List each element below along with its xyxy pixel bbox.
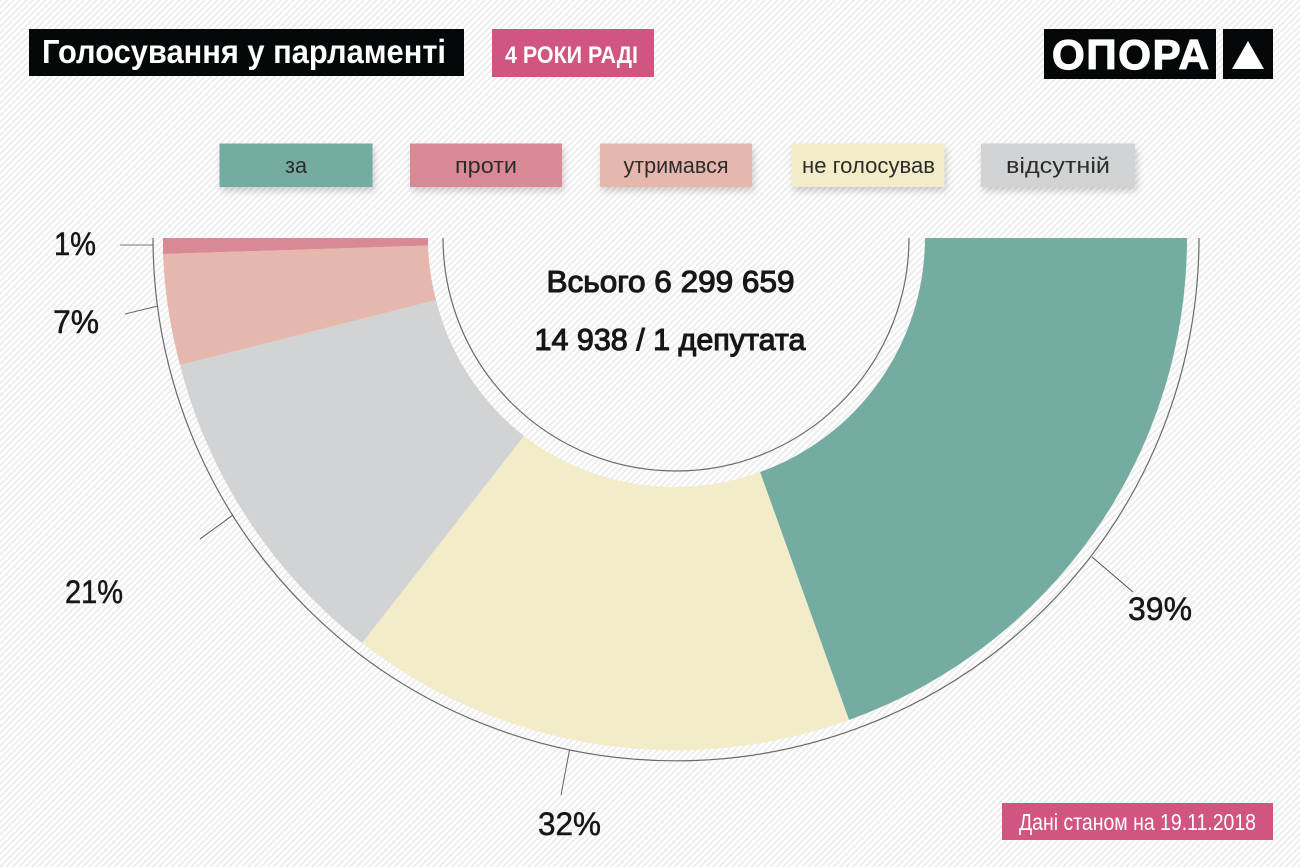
center total: Всього 6 299 659 [546, 264, 794, 299]
segment: не голосував 32% [362, 436, 849, 750]
legend item: за [220, 144, 372, 187]
semi-donut chart [163, 238, 1187, 750]
segment: відсутній 21% [180, 300, 524, 643]
badge: 4 роки ради [492, 29, 654, 77]
segment: за 39% [760, 238, 1187, 720]
logo: Опора [1044, 29, 1273, 79]
date note [1002, 803, 1273, 840]
legend item: відсутній: відсутній [1006, 153, 1110, 178]
segment: утримався 7% [163, 246, 436, 365]
title: Голосування у парламенті [42, 33, 446, 70]
legend item: утримався [600, 144, 752, 187]
legend item: проти: проти [455, 153, 517, 178]
label: 32% [538, 750, 601, 842]
legend item: за: за [285, 153, 308, 178]
label: 7% [53, 304, 158, 340]
legend item: не голосував: не голосував [802, 153, 935, 178]
label: 21%: 21% [65, 574, 123, 610]
label: 39% [1092, 557, 1192, 627]
label: 21% [65, 515, 233, 610]
date note: Дані станом на 19.11.2018 [1019, 809, 1256, 835]
inner ring line [443, 238, 909, 471]
legend item: відсутній [981, 144, 1135, 187]
label: 1%: 1% [54, 226, 96, 262]
segment: проти 1% [163, 238, 428, 254]
label: 39%: 39% [1128, 591, 1192, 627]
logo: Опора: ОПОРА [1052, 31, 1209, 78]
label: 7%: 7% [53, 304, 99, 340]
label: 1% [54, 226, 154, 262]
legend [220, 144, 1135, 187]
legend item: утримався: утримався [624, 153, 728, 178]
legend item: не голосував [792, 144, 944, 187]
center per deputy: 14 938 / 1 депутата [534, 322, 806, 357]
label: 32%: 32% [538, 806, 601, 842]
legend item: проти [410, 144, 562, 187]
outer ring line [153, 238, 1199, 761]
badge: 4 роки ради: 4 РОКИ РАДІ [505, 42, 638, 69]
